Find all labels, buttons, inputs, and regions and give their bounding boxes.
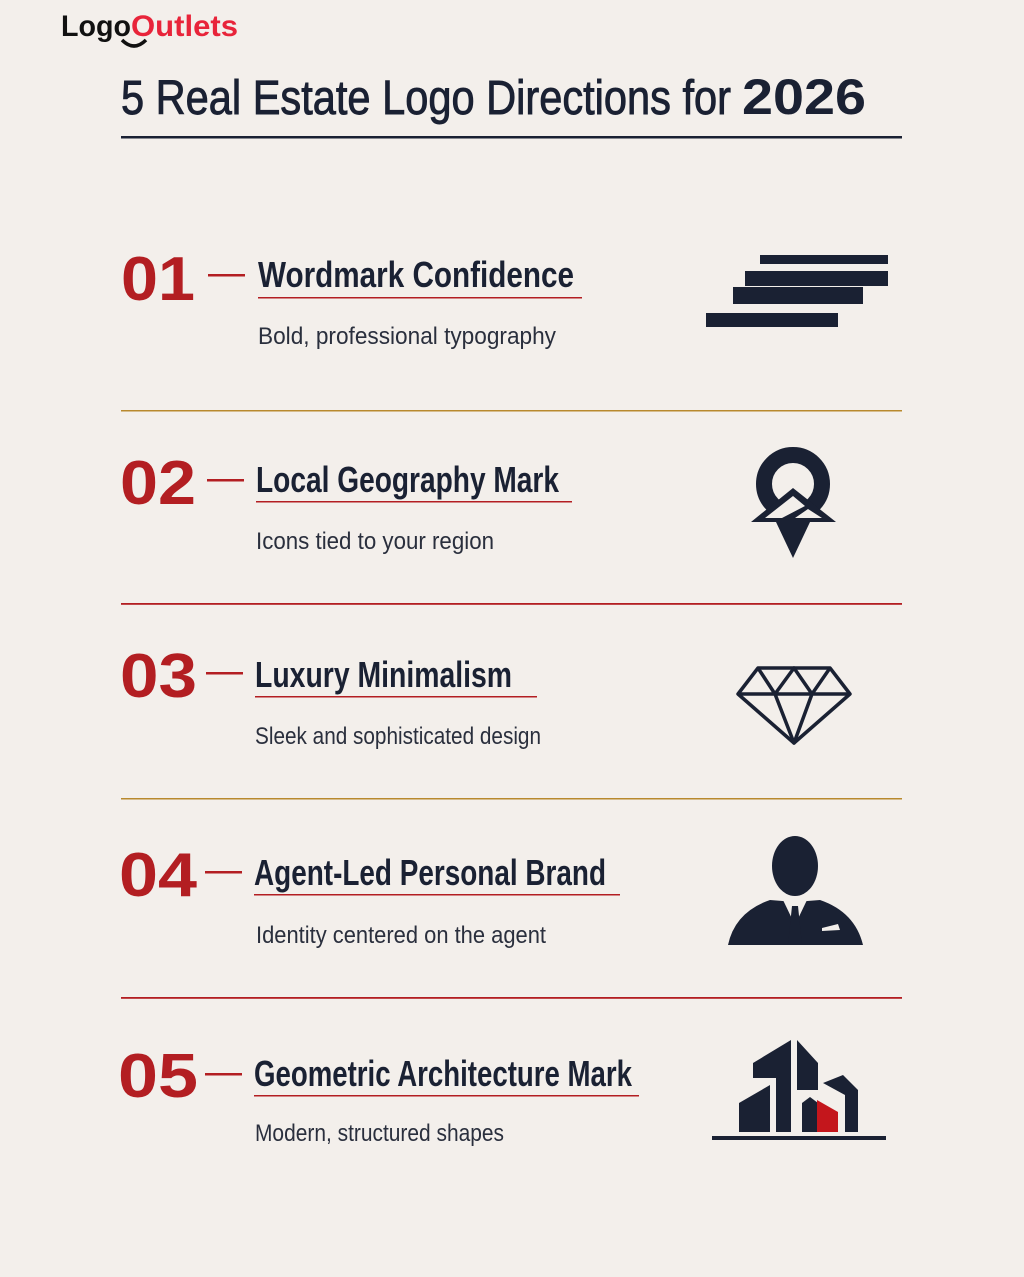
brand logo: [61, 10, 238, 46]
row 5: [118, 1042, 639, 1147]
row 1: 01: [121, 245, 195, 314]
row 2: Icons tied to your region: [256, 528, 494, 555]
row 3: [120, 642, 541, 750]
row 4: Identity centered on the agent: [256, 922, 546, 949]
icon: buildings: [712, 1040, 886, 1140]
row 2: Local Geography Mark: [256, 459, 560, 500]
title: 5 Real Estate Logo Directions for: [121, 72, 731, 125]
title: 2026: [742, 69, 866, 125]
title: [121, 69, 902, 138]
icon: map pin with mountain: [751, 455, 836, 558]
row 3: Sleek and sophisticated design: [255, 723, 541, 750]
row 2: [120, 449, 572, 555]
icon: diamond: [738, 668, 850, 743]
row 1: [121, 245, 582, 350]
row 5: Geometric Architecture Mark: [254, 1053, 633, 1094]
row 1: Wordmark Confidence: [258, 254, 574, 295]
icon: stacked bars: [706, 255, 888, 327]
row 4: Agent-Led Personal Brand: [254, 852, 606, 893]
row 3: Luxury Minimalism: [255, 654, 512, 695]
row 5: 05: [118, 1042, 198, 1111]
brand logo: Logo: [61, 10, 131, 43]
icon: agent silhouette: [728, 836, 863, 945]
brand logo: Outlets: [131, 10, 238, 43]
row 3: 03: [120, 642, 197, 711]
row 4: [119, 841, 620, 949]
row 4: 04: [119, 841, 198, 910]
row 5: Modern, structured shapes: [255, 1120, 504, 1147]
row 2: 02: [120, 449, 196, 518]
row 1: Bold, professional typography: [258, 323, 556, 350]
